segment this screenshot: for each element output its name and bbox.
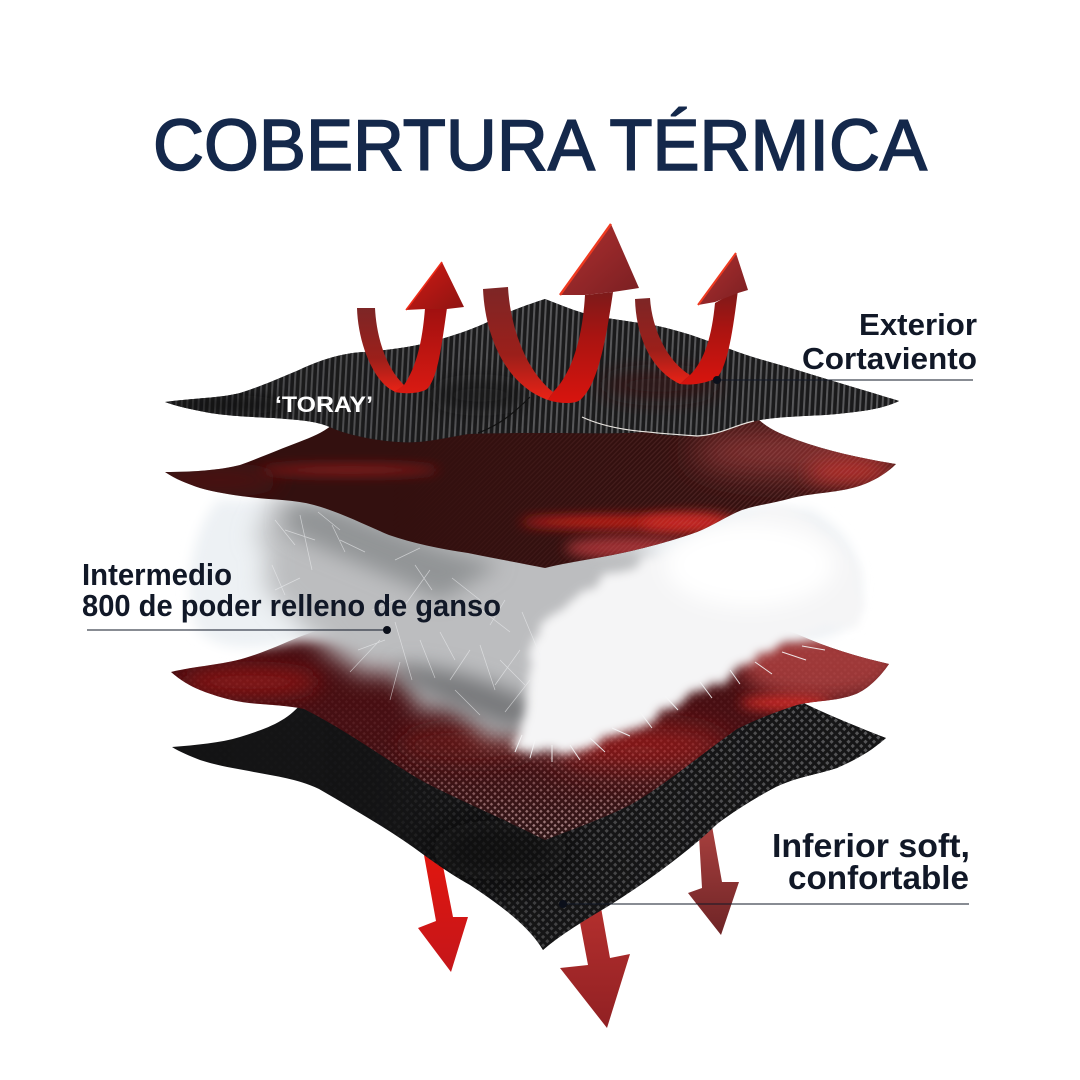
- feather fur edge, right: [515, 646, 825, 762]
- panel: bottom soft black layer: [172, 704, 886, 950]
- illustration: goose down filling: [190, 500, 864, 762]
- feather fibres, left: [272, 512, 540, 715]
- icon: heat arrow up centre: [483, 224, 639, 403]
- arrow: down centre: [560, 902, 630, 1028]
- callout: soft inner layer: Inferior soft,: [772, 827, 970, 864]
- title: COBERTURA TÉRMICA: [153, 106, 927, 186]
- outer pale halo of the down: [190, 500, 860, 647]
- icon: heat arrows leaving downward: [418, 826, 739, 1028]
- arrow: down right: [688, 826, 739, 935]
- panel: top windproof black layer: [165, 299, 899, 442]
- panel: lower red layer: [171, 632, 889, 840]
- callout: soft inner layer: [559, 827, 970, 908]
- bright cloud core: [665, 523, 835, 607]
- logo: TORAY: ‘TORAY’: [275, 392, 373, 417]
- icon: heat arrow up right: [635, 253, 748, 385]
- callout: exterior windproof: Exterior: [859, 307, 977, 342]
- callout: middle down fill: [82, 557, 501, 634]
- callout: soft inner layer: confortable: [788, 859, 969, 896]
- shadow beneath upper layer: [285, 500, 500, 600]
- darker shadow under the down: [400, 665, 533, 728]
- callout: exterior windproof: [713, 307, 977, 384]
- callout: middle down fill: Intermedio: [82, 557, 232, 592]
- callout: exterior windproof: Cortaviento: [802, 341, 977, 376]
- grey shaded body of the down: [262, 500, 651, 745]
- icon: heat arrow up left: [357, 262, 464, 393]
- callout: middle down fill: 800 de poder relleno de ganso: [82, 588, 501, 623]
- arrow: down left: [418, 855, 468, 972]
- seam of folded fabric: [582, 417, 754, 436]
- white fluffy mass: [513, 504, 864, 754]
- panel: upper red layer: [165, 420, 896, 568]
